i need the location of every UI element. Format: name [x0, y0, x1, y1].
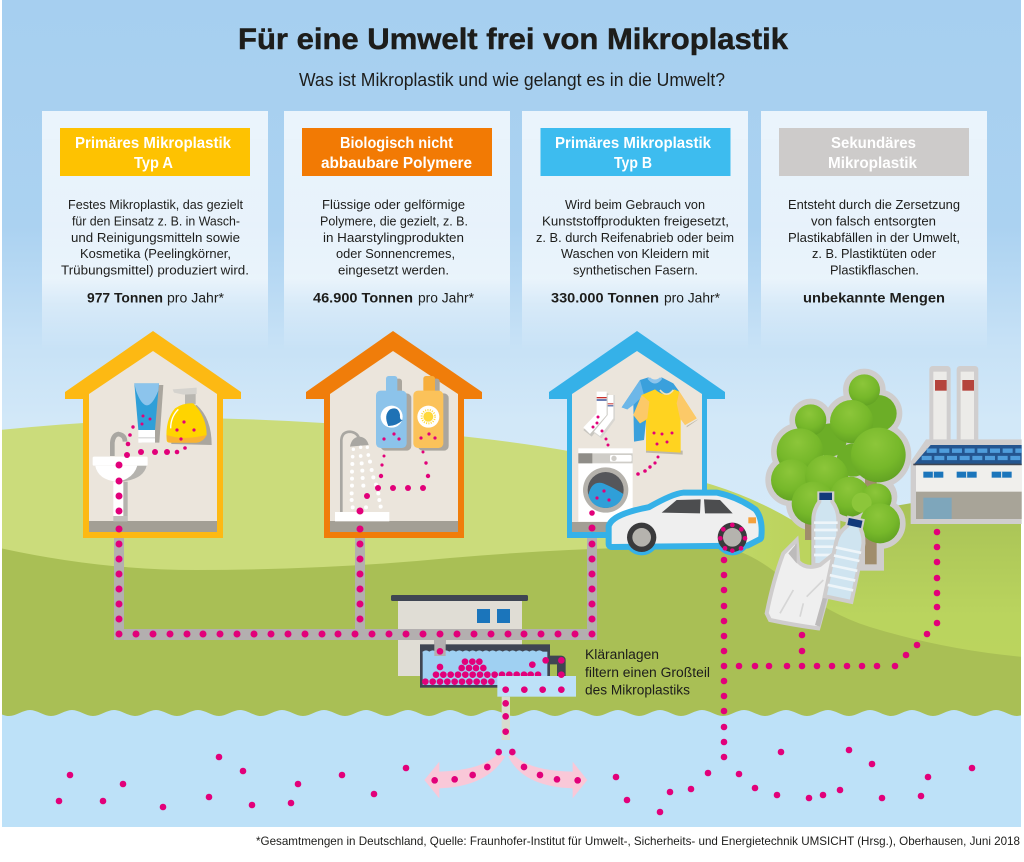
callout: treatment plant note: filtern einen Großteil [585, 665, 710, 680]
panel: Primäres Mikroplastik Typ B: Primäres Mikroplastik [555, 135, 711, 152]
panel: Primäres Mikroplastik Typ A: für den Einsatz z. B. in Wasch- [72, 214, 240, 228]
microplastic dots in outflow [431, 657, 581, 784]
panel: Primäres Mikroplastik Typ A: Kosmetika (Peelingkörner, [80, 246, 231, 261]
panel: Biologisch nicht abbaubare Polymere: abbaubare Polymere [321, 155, 472, 172]
house 3: laundry [549, 331, 725, 538]
panel: Primäres Mikroplastik Typ B: 330.000 Tonnen [551, 290, 659, 306]
house 1: bathroom [65, 331, 241, 538]
panel: Sekundäres Mikroplastik: unbekannte Mengen [803, 290, 945, 306]
panel: Primäres Mikroplastik Typ A: Primäres Mikroplastik [75, 135, 231, 152]
water [0, 710, 1024, 830]
panel: Biologisch nicht abbaubare Polymere: Flüssige oder gelförmige [322, 197, 465, 212]
panel: Primäres Mikroplastik Typ B: Wird beim Gebrauch von [565, 197, 705, 212]
microplastic dots [589, 416, 674, 516]
microplastic dots along pipes [116, 524, 596, 638]
panel: Sekundäres Mikroplastik: von falsch entsorgten [811, 214, 936, 228]
microplastic dots [356, 432, 437, 514]
panel: Primäres Mikroplastik Typ B: Kunststoffprodukten freigesetzt, [542, 214, 729, 228]
panel: Sekundäres Mikroplastik [761, 111, 987, 351]
treatment plant building [391, 595, 528, 676]
panel: Primäres Mikroplastik Typ A: Typ A [134, 155, 173, 172]
callout: treatment plant note: des Mikroplastiks [585, 682, 690, 698]
factory [911, 366, 1022, 524]
panel: Sekundäres Mikroplastik: Mikroplastik [828, 155, 917, 172]
panel: Biologisch nicht abbaubare Polymere: 46.900 Tonnen [313, 290, 413, 306]
icon: shower and bottles [335, 376, 449, 521]
panel: Primäres Mikroplastik Typ A: pro Jahr* [167, 290, 225, 306]
panel: Biologisch nicht abbaubare Polymere: pro Jahr* [418, 290, 475, 306]
panel: Biologisch nicht abbaubare Polymere: in Haarstylingprodukten [323, 230, 464, 245]
arrow: outflow to the right [508, 753, 587, 798]
icon: socks, shirts, washing machine [578, 377, 698, 522]
panel: Sekundäres Mikroplastik: Plastikflaschen. [830, 262, 919, 278]
title: Für eine Umwelt frei von Mikroplastik [238, 23, 788, 56]
panel: Sekundäres Mikroplastik: Entsteht durch die Zersetzung [788, 197, 960, 212]
microplastic dots in tank [422, 648, 549, 685]
house 2: shower [306, 331, 482, 538]
panel: Primäres Mikroplastik Typ A: Trübungsmittel) produziert wird. [61, 262, 249, 278]
plastic waste: bottles and bag [767, 493, 868, 628]
microplastic dots in water [56, 747, 975, 815]
panel: Biologisch nicht abbaubare Polymere: Polymere, die gezielt, z. B. [320, 214, 468, 228]
panel: Primäres Mikroplastik Typ B: synthetischen Fasern. [573, 262, 698, 278]
panel: Biologisch nicht abbaubare Polymere: eingesetzt werden. [338, 262, 449, 278]
treatment tank [420, 640, 587, 798]
callout: treatment plant note: Kläranlagen [585, 647, 659, 662]
panel: Primäres Mikroplastik Typ B: z. B. durch Reifenabrieb oder beim [536, 230, 734, 245]
microplastic dots [116, 414, 196, 514]
panel: Sekundäres Mikroplastik: Sekundäres [831, 135, 916, 152]
tree [771, 374, 906, 565]
panel: Primäres Mikroplastik Typ A [42, 111, 268, 351]
car [612, 496, 759, 555]
panel: Primäres Mikroplastik Typ B: pro Jahr* [664, 290, 721, 306]
panel: Biologisch nicht abbaubare Polymere: Biologisch nicht [340, 135, 453, 152]
sewage pipes [114, 530, 597, 656]
panel: Primäres Mikroplastik Typ A: 977 Tonnen [87, 290, 163, 306]
outflow box and pipe [497, 676, 576, 740]
panel: Biologisch nicht abbaubare Polymere [284, 111, 510, 351]
panel: Sekundäres Mikroplastik: z. B. Plastiktüten oder [812, 246, 937, 261]
panel: Primäres Mikroplastik Typ A: Festes Mikroplastik, das gezielt [68, 197, 243, 212]
panel: Primäres Mikroplastik Typ B [522, 111, 748, 351]
footnote: source: *Gesamtmengen in Deutschland, Quelle: Fraunhofer-Institut für Umwelt-, Sicherheits- und Energietechnik UMSICHT (Hrsg.), Oberhausen, Juni 2018 [256, 834, 1020, 848]
arrow: outflow to the left [424, 753, 505, 798]
panel: Primäres Mikroplastik Typ A: und Reinigungsmitteln sowie [71, 230, 240, 245]
microplastic trail from car, waste and factory [721, 529, 940, 760]
panel: Primäres Mikroplastik Typ B: Waschen von Kleidern mit [561, 246, 709, 261]
panel: Biologisch nicht abbaubare Polymere: oder Sonnencremes, [336, 246, 455, 261]
panel: Sekundäres Mikroplastik: Plastikabfällen in der Umwelt, [788, 230, 960, 245]
panel: Primäres Mikroplastik Typ B: Typ B [614, 155, 652, 172]
subtitle: Was ist Mikroplastik und wie gelangt es in die Umwelt? [299, 70, 725, 90]
icon: cosmetics tube and soap dispenser, sink [93, 383, 212, 521]
callout: treatment plant note [585, 647, 710, 698]
